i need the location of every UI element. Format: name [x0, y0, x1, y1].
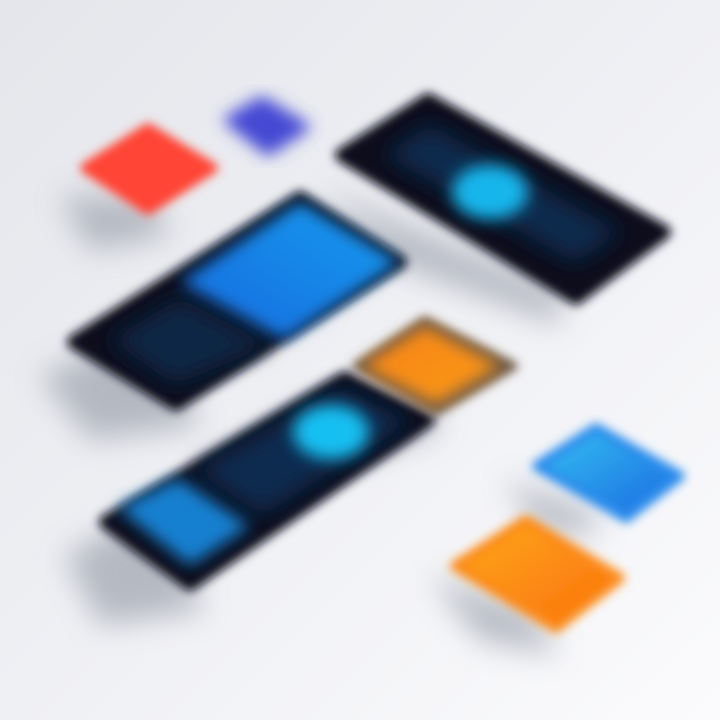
shadows [40, 190, 600, 655]
phone: top right dark [342, 100, 664, 298]
icon: cyan circle [452, 165, 528, 219]
icon: orange tile [455, 520, 620, 628]
icon: purple tile [228, 100, 306, 152]
phone: bottom dark with blue panel [106, 378, 428, 584]
icon: cyan circle [293, 405, 369, 459]
icon: orange tile on phone [356, 320, 514, 412]
icon: blue tile [537, 428, 680, 518]
phone: middle blue and dark [74, 198, 400, 404]
icon: red tile [85, 128, 213, 210]
